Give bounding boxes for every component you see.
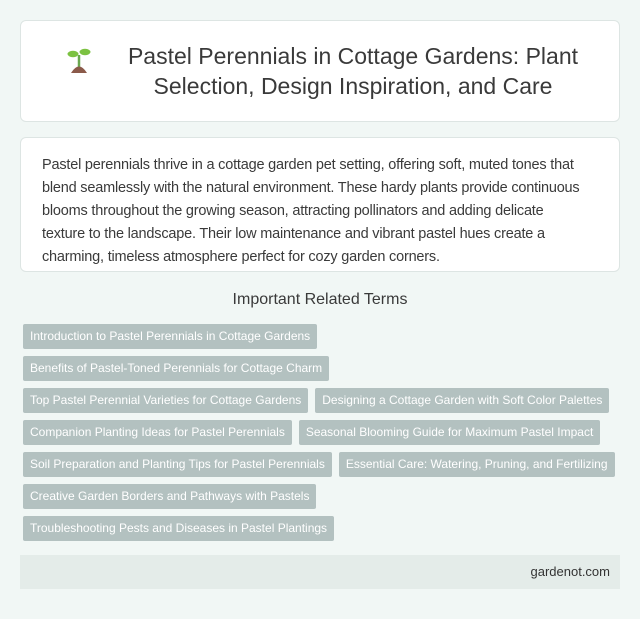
description text: [42, 157, 580, 265]
header card: [20, 20, 620, 122]
icon: seedling: [68, 48, 90, 73]
related terms tags: Seasonal Blooming Guide for Maximum Pastel Impact: [306, 425, 593, 439]
footer: [20, 555, 620, 589]
related terms tags: Companion Planting Ideas for Pastel Perennials: [30, 425, 285, 439]
title: Pastel Perennials in Cottage Gardens: Plant Selection, Design Inspiration, and Care: [128, 43, 578, 99]
related terms tags: Introduction to Pastel Perennials in Cottage Gardens: [30, 329, 310, 343]
description text: blooms throughout the growing season, attracting pollinators and adding delicate: [42, 203, 544, 219]
section heading: Important Related Terms: [233, 291, 407, 308]
footer text: gardenot.com: [530, 564, 610, 579]
related terms tags: Troubleshooting Pests and Diseases in Pastel Plantings: [30, 521, 327, 535]
related terms tags: [23, 324, 615, 541]
related terms tags: Soil Preparation and Planting Tips for Pastel Perennials: [30, 457, 325, 471]
description text: texture to the landscape. Their low maintenance and vibrant pastel hues create a: [42, 226, 545, 242]
related terms tags: Designing a Cottage Garden with Soft Color Palettes: [322, 393, 602, 407]
description card: [20, 137, 620, 272]
related terms tags: Top Pastel Perennial Varieties for Cottage Gardens: [30, 393, 301, 407]
description text: Pastel perennials thrive in a cottage garden pet setting, offering soft, muted tones that: [42, 157, 574, 173]
description text: blend seamlessly with the natural environment. These hardy plants provide continuous: [42, 180, 579, 196]
related terms tags: Benefits of Pastel-Toned Perennials for Cottage Charm: [30, 361, 322, 375]
related terms tags: Essential Care: Watering, Pruning, and Fertilizing: [346, 457, 608, 471]
description text: charming, timeless atmosphere perfect for cozy garden corners.: [42, 249, 440, 265]
related terms tags: Creative Garden Borders and Pathways with Pastels: [30, 489, 309, 503]
